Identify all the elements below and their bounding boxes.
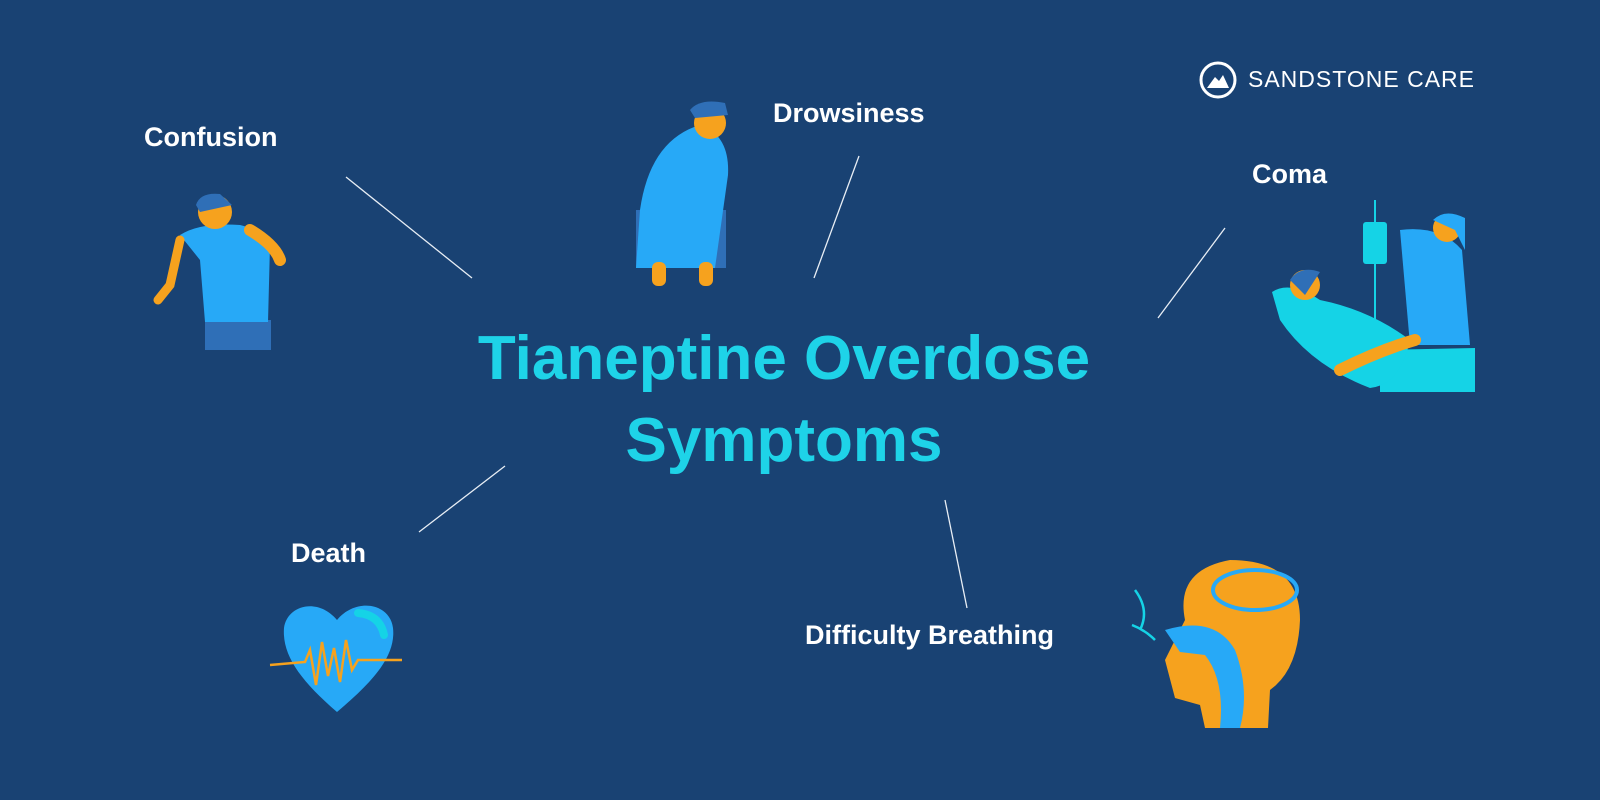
title: [478, 324, 1090, 475]
label: Difficulty Breathing: Difficulty Breathing: [805, 620, 1054, 650]
label: Coma: Coma: [1252, 159, 1327, 189]
logo: SANDSTONE CARE: [1248, 66, 1475, 92]
icon: breathing head: [1132, 560, 1300, 728]
title: Symptoms: [626, 406, 942, 475]
label: Drowsiness: Drowsiness: [773, 98, 925, 128]
icon: coma scene: [1272, 200, 1475, 392]
logo: [1200, 62, 1475, 98]
label: Confusion: Confusion: [144, 122, 277, 152]
icon: heart with pulse: [270, 606, 402, 712]
icon: drowsiness person: [636, 102, 728, 286]
title: Tianeptine Overdose: [478, 324, 1090, 393]
label: Death: Death: [291, 538, 366, 568]
